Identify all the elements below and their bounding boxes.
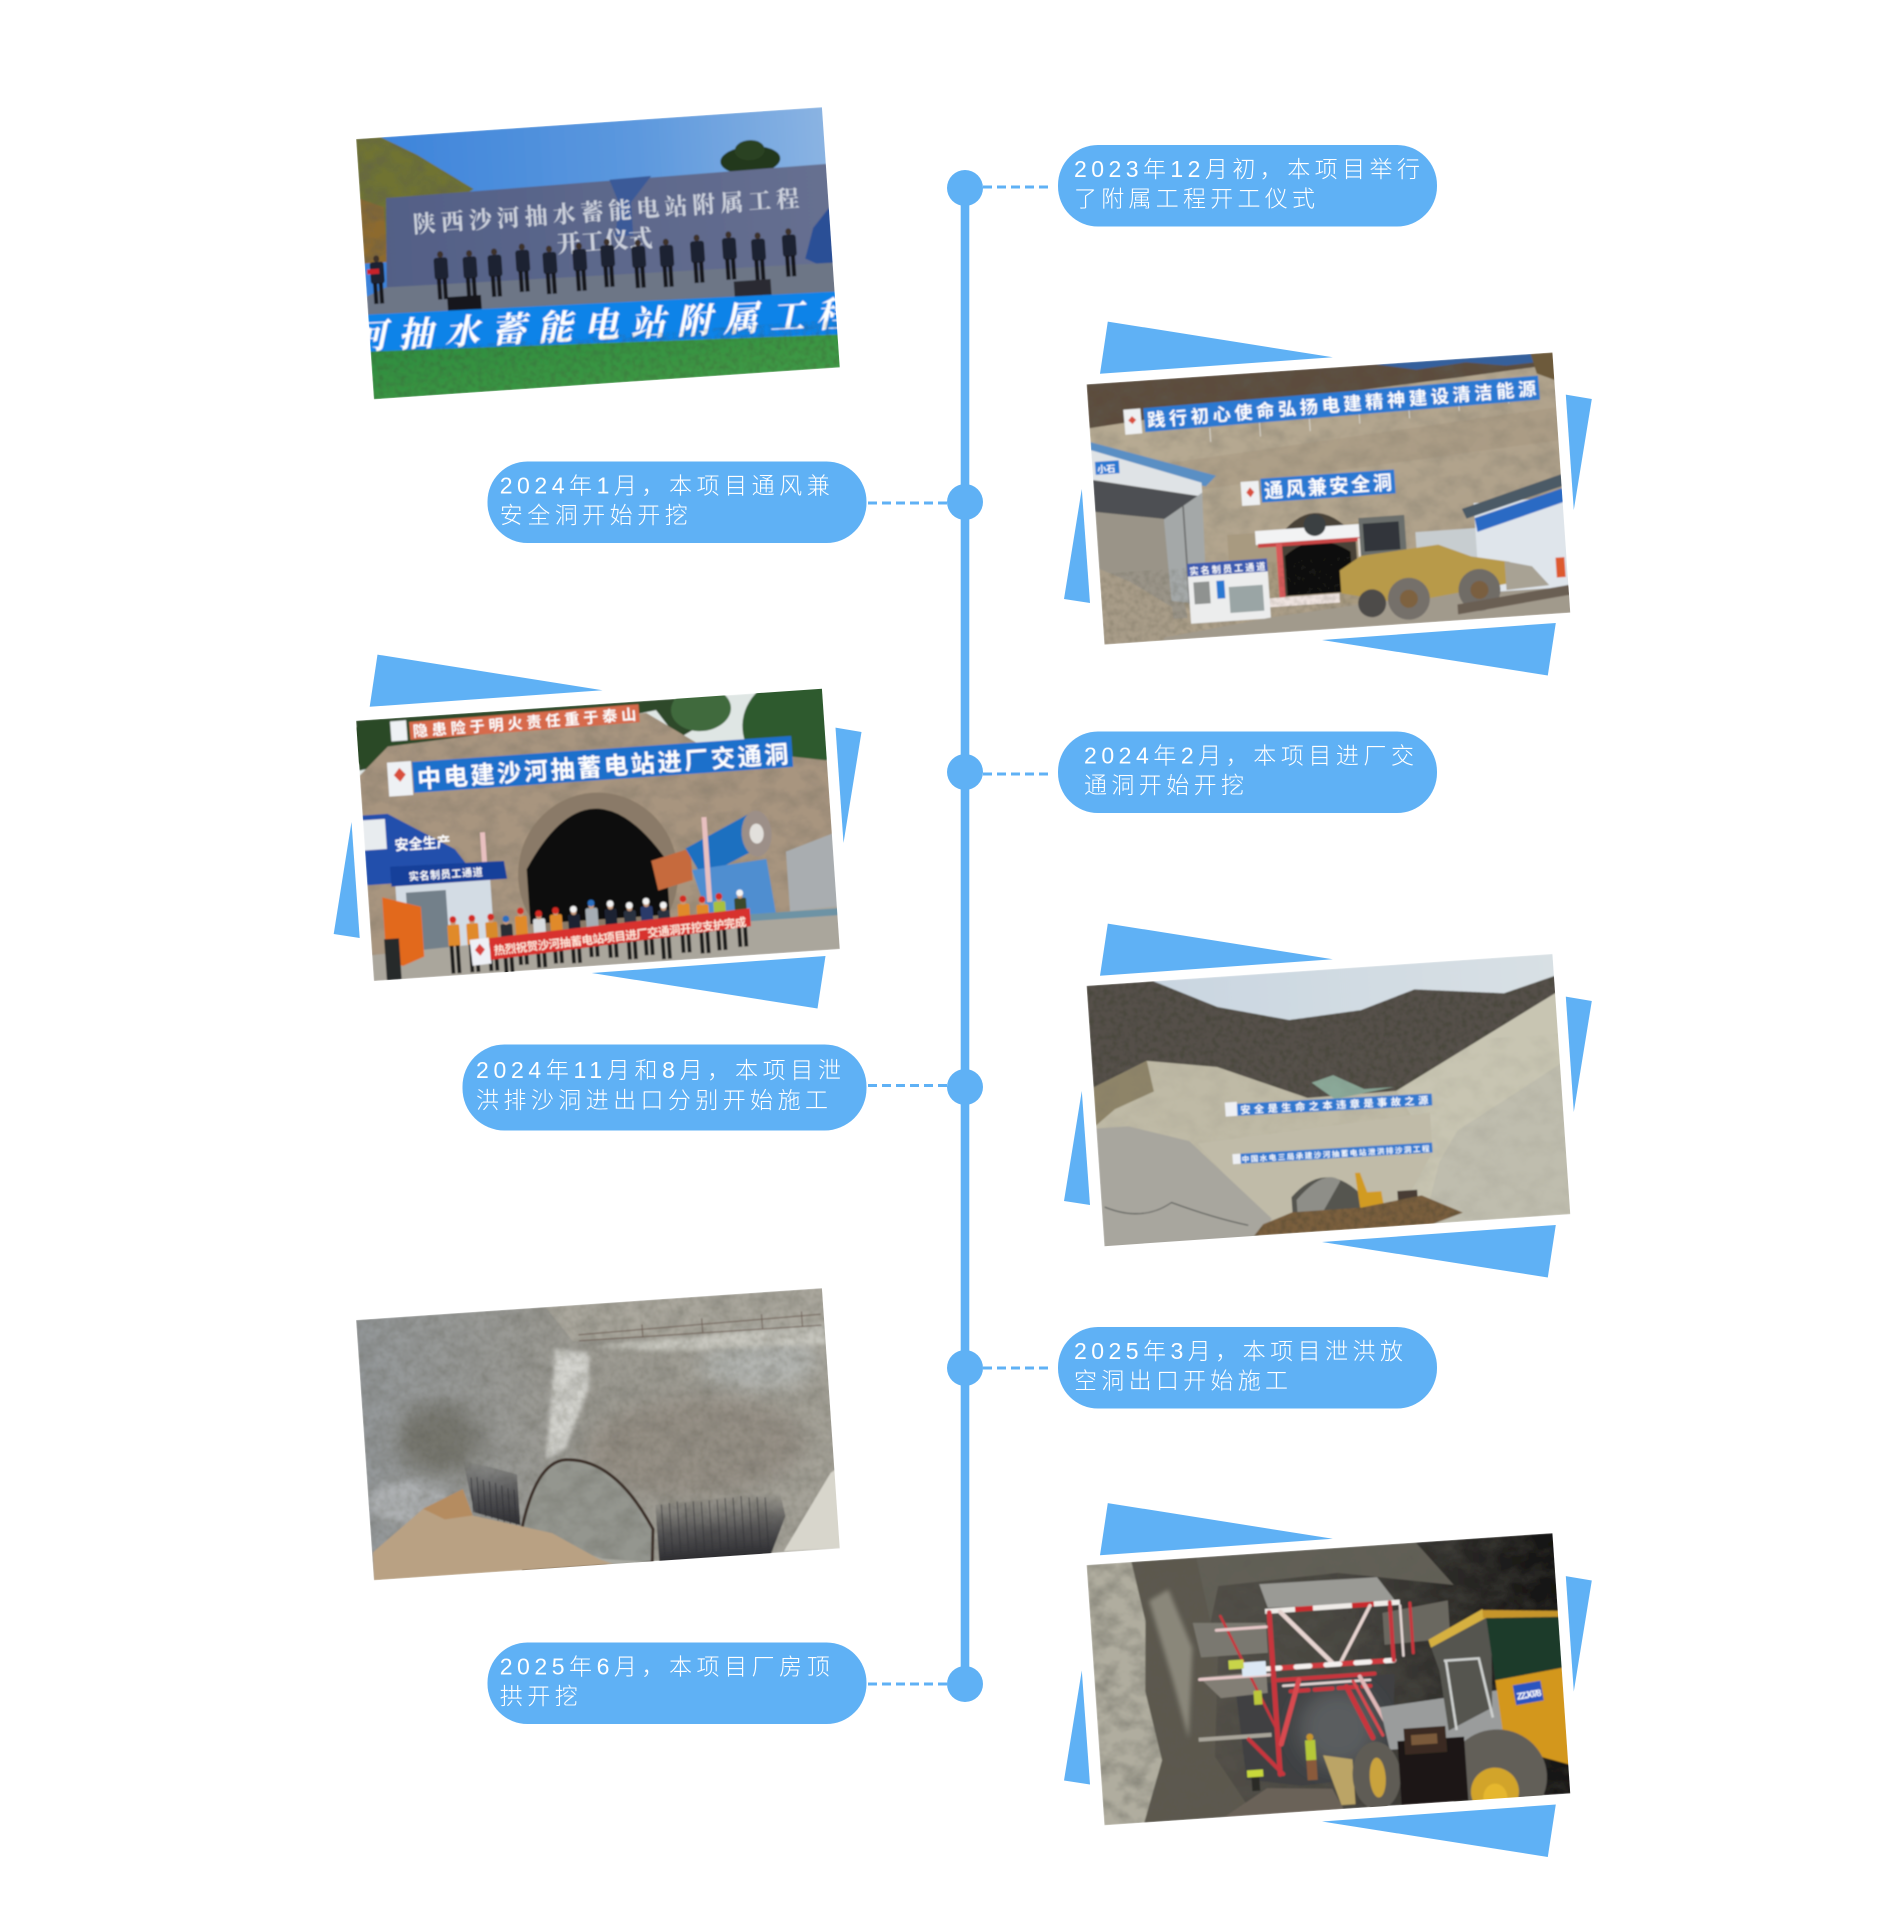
photo 3 image: access tunnel with team banner: 实名制员工通道	[408, 865, 483, 883]
caption pill 3: 通洞开始开挖	[1084, 772, 1244, 798]
photo 3 image: access tunnel with team banner	[356, 688, 840, 981]
node 6	[947, 1666, 983, 1702]
caption pill 6	[488, 1642, 866, 1724]
caption pill 5: 2025年3月，本项目泄洪放	[1074, 1338, 1403, 1364]
photo 3 image: access tunnel with team banner: 热烈祝贺沙河抽蓄电站项目进厂交通洞开挖支护完成	[493, 915, 748, 958]
node 1	[947, 170, 983, 206]
connector 4	[868, 1084, 947, 1087]
caption pill 2: 安全洞开始开挖	[500, 502, 688, 528]
photo 4 image: sediment tunnel portal in valley: 中国水电三局承建沙河抽蓄电站泄洪排沙洞工程	[1241, 1143, 1430, 1164]
photo 6 image: powerhouse crown excavation with loader: ZZJ-078	[1516, 1688, 1542, 1703]
photo 4 triangle accents	[1064, 924, 1592, 1278]
photo 1: groundbreaking ceremony: 河抽水蓄能电站附属工程	[351, 294, 857, 357]
timeline item 6: June 2025	[488, 1503, 1592, 1857]
photo 2 image: ventilation tunnel: 实名制员工通道	[1189, 561, 1266, 577]
infographic: project construction timeline	[334, 107, 1592, 1857]
node 5	[947, 1350, 983, 1386]
photo 1: groundbreaking ceremony: 陕西沙河抽水蓄能电站附属工程	[412, 185, 800, 237]
photo 3 image: access tunnel with team banner: 中电建沙河抽蓄电站进厂交通洞	[416, 740, 789, 794]
node 2	[947, 484, 983, 520]
photo 4 image: sediment tunnel portal in valley: 安全是生命之本违章是事故之源	[1240, 1094, 1428, 1117]
caption pill 5: 空洞出口开始施工	[1074, 1368, 1288, 1394]
photo 2 image: ventilation tunnel: 践行初心使命弘扬电建精神建设清洁能源	[1146, 378, 1537, 431]
caption pill 1: 2023年12月初，本项目举行	[1074, 156, 1420, 182]
node 3	[947, 754, 983, 790]
caption pill 2	[488, 462, 866, 543]
photo 1: groundbreaking ceremony	[337, 106, 860, 401]
photo 1: groundbreaking ceremony: 开工仪式	[556, 225, 653, 258]
caption pill 3	[1058, 732, 1437, 813]
caption pill 6: 拱开挖	[500, 1683, 578, 1709]
timeline item 2: January 2024	[488, 322, 1592, 676]
photo 2 image: ventilation tunnel	[1086, 352, 1571, 645]
node 4	[947, 1069, 983, 1105]
connector 2	[868, 502, 947, 504]
timeline item 4: November and August 2024	[462, 924, 1592, 1278]
connector 3	[983, 772, 1052, 776]
timeline item 1: December 2023	[337, 106, 1437, 401]
caption pill 1	[1058, 145, 1437, 226]
photo 3 image: access tunnel with team banner: 安全生产	[394, 834, 451, 853]
photo 2 image: ventilation tunnel: 通风兼安全洞	[1263, 471, 1393, 502]
caption pill 6: 2025年6月，本项目厂房顶	[500, 1654, 830, 1680]
photo 4 image: sediment tunnel portal in valley	[1086, 954, 1571, 1249]
photo 5 image: spillway tunnel outlet rock face	[356, 1288, 841, 1581]
caption pill 2: 2024年1月，本项目通风兼	[500, 472, 830, 498]
photo 2 image: ventilation tunnel: 小石	[1097, 463, 1116, 475]
caption pill 1: 了附属工程开工仪式	[1074, 186, 1315, 212]
connector 1	[983, 186, 1052, 188]
connector 6	[868, 1682, 947, 1686]
caption pill 5	[1058, 1327, 1437, 1408]
photo 2 triangle accents	[1064, 322, 1592, 676]
timeline item 5: March 2025	[356, 1288, 1437, 1581]
photo 3 triangle accents	[334, 655, 862, 1008]
caption pill 3: 2024年2月，本项目进厂交	[1084, 742, 1414, 768]
photo 6 image: powerhouse crown excavation with loader	[1086, 1533, 1573, 1852]
timeline spine	[961, 188, 969, 1684]
caption pill 4: 2024年11月和8月，本项目泄	[476, 1057, 841, 1083]
caption pill 4	[462, 1044, 866, 1130]
caption pill 4: 洪排沙洞进出口分别开始施工	[476, 1087, 828, 1113]
photo 6 triangle accents	[1064, 1503, 1592, 1857]
connector 5	[983, 1366, 1052, 1370]
photo 3 image: access tunnel with team banner: 隐患险于明火责任重于泰山	[412, 706, 637, 741]
timeline item 3: February 2024	[334, 655, 1437, 1008]
